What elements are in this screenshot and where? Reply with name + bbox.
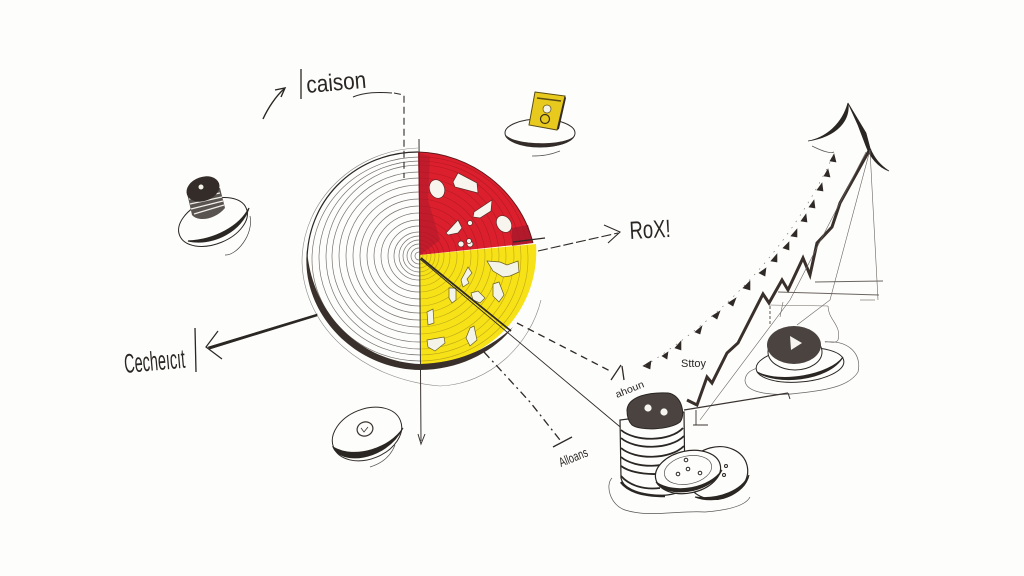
dashed leader to Icaison label [353,92,404,178]
leader lines from pie to coins [420,258,625,447]
arrow: top-left pointer [263,88,285,119]
label: settoy: Sttoy [681,358,706,370]
vertical axis arrow [418,139,425,444]
dark rim [306,250,513,370]
line chart: rising trend [687,103,889,420]
chart peak crescent [808,103,848,141]
label: Icaison: caison [305,67,367,99]
thin guide lines [700,150,883,420]
arrow: Cechecit [195,314,317,372]
icon: coin stack on plate, left [171,172,255,256]
arrow: Rox [513,225,620,251]
white chips in red [427,173,515,247]
yellow segment [420,244,536,364]
back flat coin [680,440,754,506]
pie chart [302,148,541,386]
label: ahoun: ahoun [614,379,646,401]
front flat coin [651,445,725,499]
icon: yellow book on plate [505,92,575,156]
label: Rox!: RoX! [629,215,671,245]
icon: flat token, bottom [324,397,410,471]
white chips in yellow [427,261,519,351]
icon: coin stack [609,393,754,514]
label: Cechecit: Cecheıcıt [123,344,187,379]
label: Alloans: Alloans [557,445,590,470]
connector from coin stack to play token [684,393,790,425]
icon: play token on plate [745,326,859,394]
dotted trend arrows [643,154,836,369]
left white segment with rings [306,151,421,362]
red segment [418,152,534,255]
ground outline [609,478,750,514]
outer sketch outlines [302,148,541,386]
